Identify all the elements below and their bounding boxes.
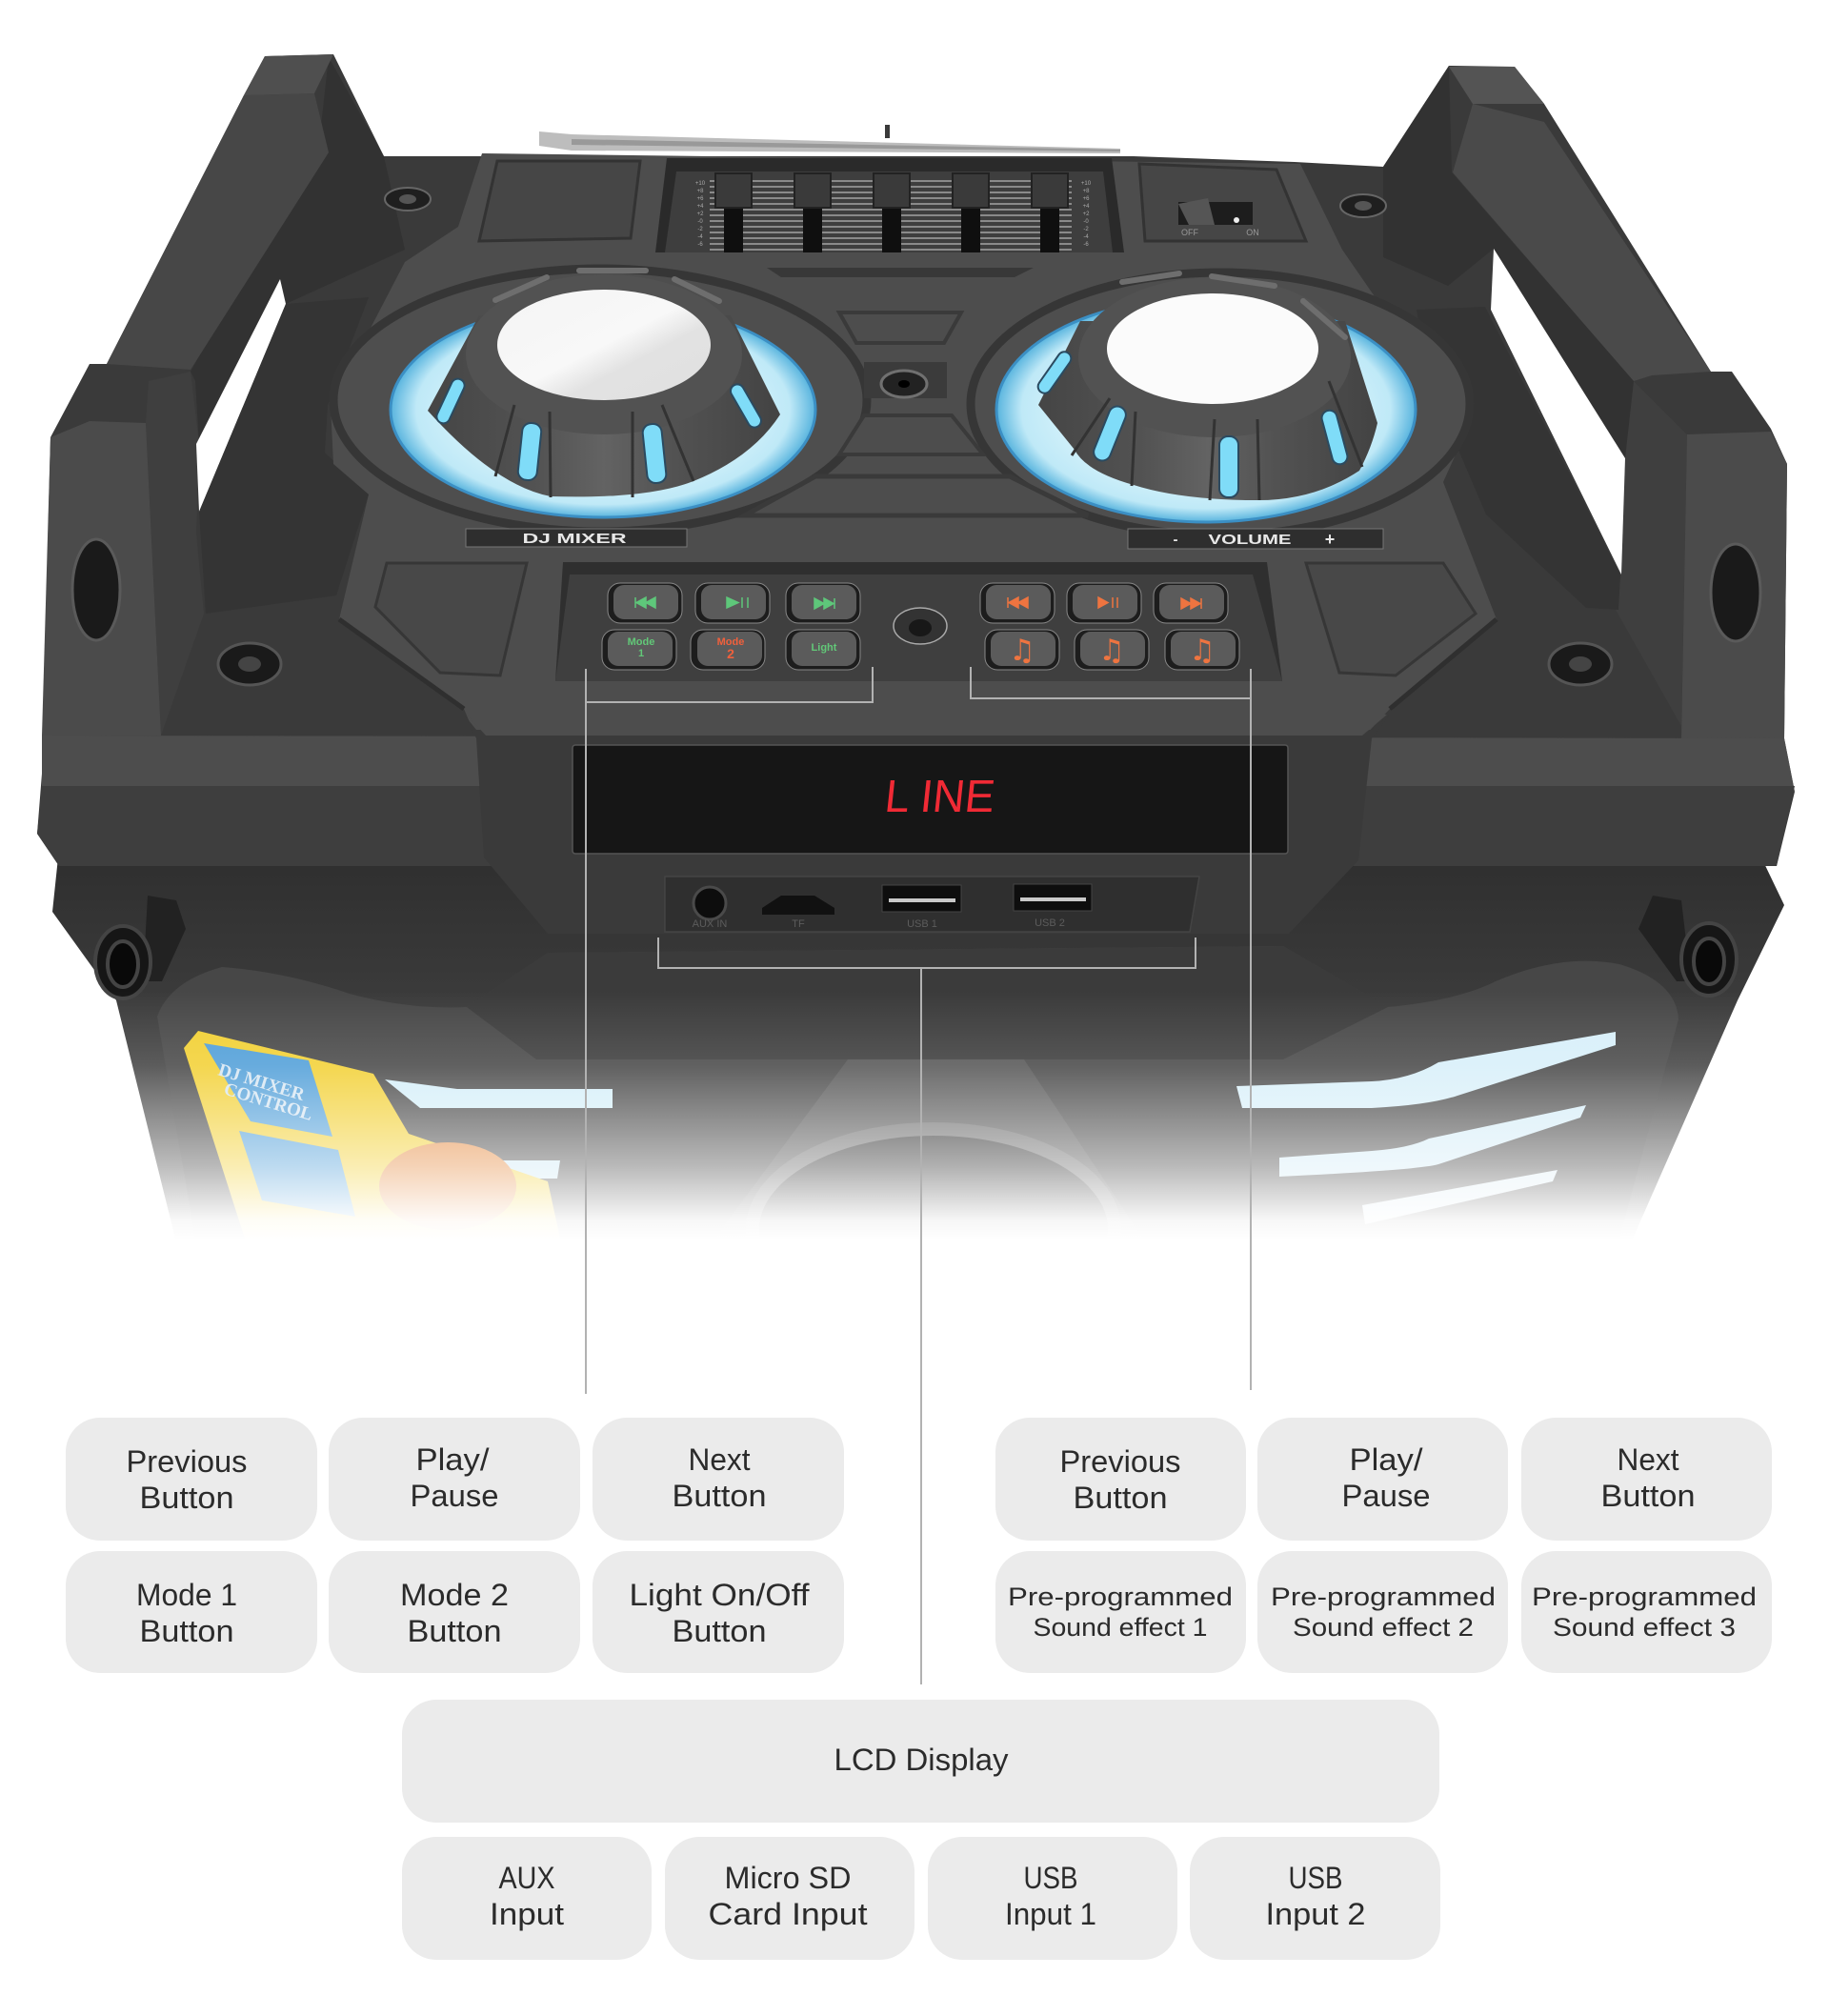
label: sound effect 3: Sound effect 3 [1553, 1613, 1736, 1642]
rim tabs [495, 271, 719, 301]
label: sound effect 2: Sound effect 2 [1293, 1613, 1474, 1642]
volume plate: + [1325, 530, 1335, 549]
left screw top [385, 188, 431, 211]
light strip left 2 [502, 1160, 560, 1179]
labels: right group [995, 1418, 1772, 1673]
centre slot upper [839, 312, 961, 343]
right screw top [1340, 194, 1386, 217]
speaker port [753, 1129, 1115, 1329]
right jog wheel [996, 273, 1416, 522]
power switch [1178, 198, 1259, 237]
silhouette [37, 54, 1795, 866]
label: previous button [995, 1418, 1246, 1541]
light strip right 2 [1279, 1105, 1586, 1177]
white gap right [1491, 249, 1625, 575]
knob rim [1078, 277, 1351, 437]
right handle bar [1453, 104, 1711, 381]
mode 2 key: Mode [717, 636, 744, 648]
left strut inner face [191, 57, 405, 444]
label: mode 1 button: Mode 1 [136, 1578, 237, 1612]
speaker cabinet [0, 857, 1829, 1353]
cabinet centre recess [467, 946, 1388, 1059]
silver disc [497, 290, 711, 400]
label: micro SD: Micro SD [724, 1861, 852, 1895]
left corner bolt [95, 896, 186, 998]
label: play pause [329, 1418, 580, 1541]
knob rim [466, 274, 742, 434]
play pause key [1067, 583, 1141, 623]
next key [786, 583, 860, 623]
blue ring [996, 297, 1416, 522]
mode 2 key [691, 630, 765, 670]
label: next button: Next [1618, 1442, 1679, 1477]
eq scale right: -4 [1083, 234, 1089, 240]
label: play pause: Play/ [415, 1442, 490, 1477]
play pause key [695, 583, 770, 623]
callout line: right button group [971, 667, 1251, 1390]
eq scale left: +8 [697, 189, 704, 194]
label: next button [1521, 1418, 1772, 1541]
blue ring [391, 302, 815, 517]
label: AUX input [402, 1837, 652, 1960]
usb 2: USB 2 [1035, 917, 1065, 929]
panel face [555, 575, 1282, 681]
label: mode 2 button: Button [408, 1614, 501, 1648]
eq scale right: -0 [1083, 219, 1089, 225]
label: USB input 2 [1190, 1837, 1440, 1960]
centre hub [864, 362, 947, 398]
lower left recess [375, 563, 527, 675]
label: AUX input: AUX [499, 1861, 554, 1895]
eq scale right: -2 [1083, 227, 1089, 232]
right handle cap [1449, 67, 1544, 104]
left handle bar [107, 93, 329, 370]
label: AUX input: Input [490, 1897, 564, 1931]
sound 3 key [1165, 630, 1239, 670]
label: light button: Light On/Off [629, 1578, 810, 1612]
label: play pause: Play/ [1349, 1442, 1423, 1477]
labels: inputs [402, 1837, 1440, 1960]
cabinet inner front panel [157, 946, 1678, 1239]
white gap left [196, 279, 286, 512]
label: sound effect 3: Pre-programmed [1532, 1583, 1757, 1611]
label: sound effect 3 [1521, 1551, 1772, 1673]
LCD display [573, 745, 1288, 854]
volume plate: VOLUME [1208, 532, 1292, 548]
label: previous button [66, 1418, 317, 1541]
fade to white [0, 991, 1829, 1240]
label: micro SD [665, 1837, 914, 1960]
left bezel [333, 269, 867, 532]
power switch: OFF [1181, 228, 1198, 237]
light key: Light [812, 642, 837, 654]
label: previous button: Previous [1059, 1444, 1181, 1479]
left handle cap [244, 54, 333, 95]
usb 1 [882, 885, 961, 930]
DJ mixer plate: DJ MIXER [522, 531, 627, 547]
previous key [980, 583, 1055, 623]
glow slots [434, 376, 764, 484]
label: mode 2 button: Mode 2 [400, 1578, 509, 1612]
speaker port funnel [714, 1059, 1143, 1239]
eq scale left: -2 [697, 227, 703, 232]
label: previous button: Previous [126, 1444, 248, 1479]
label: mode 1 button: Button [139, 1614, 234, 1648]
right screw bottom [1549, 643, 1612, 685]
mode 1 key: 1 [638, 648, 644, 659]
label: USB input 2: Input 2 [1265, 1897, 1366, 1931]
next key [1154, 583, 1228, 623]
right corner bolt [1638, 896, 1737, 996]
sticker blue panel 1 [204, 1043, 332, 1137]
sticker blue panel 2 [239, 1131, 355, 1217]
rim tabs [1122, 273, 1345, 337]
callout line: inputs and display [658, 937, 1196, 1684]
label: USB input 2: USB [1288, 1861, 1343, 1895]
label: play pause: Pause [410, 1479, 499, 1513]
label: next button: Button [673, 1479, 766, 1513]
previous key [608, 583, 682, 623]
label: sound effect 2 [1257, 1551, 1508, 1673]
button panel [555, 562, 1282, 681]
right textured deck [1417, 307, 1620, 610]
label: mode 2 button [329, 1551, 580, 1673]
right button group [980, 583, 1239, 670]
silver disc [1107, 293, 1318, 404]
faceplate [218, 125, 1612, 738]
light strip right 3 [1362, 1170, 1558, 1224]
eq scale right: -6 [1083, 242, 1089, 248]
white floor below fade [0, 1239, 1829, 1353]
eq scale right: +10 [1081, 181, 1092, 187]
glow slots [1035, 350, 1349, 497]
eq scale right: +6 [1083, 196, 1090, 202]
centre wide slot [745, 476, 1088, 515]
right top recess [1139, 164, 1306, 241]
equaliser [655, 158, 1124, 252]
left post [42, 421, 161, 736]
slider caps [715, 173, 1068, 208]
eq scale left: -4 [697, 234, 703, 240]
speaker body with handles [37, 54, 1795, 866]
eq scale left: +10 [695, 181, 706, 187]
label: sound effect 1: Sound effect 1 [1033, 1613, 1208, 1642]
lower right recess [1306, 563, 1476, 675]
light strip left 1 [385, 1079, 613, 1108]
base front face [37, 786, 1795, 866]
sticker blue panel 1: DJ MIXER [216, 1060, 307, 1105]
label: play pause [1257, 1418, 1508, 1541]
slider slots [734, 207, 1050, 252]
sound 3 key: ♫ [1189, 634, 1216, 668]
label: sound effect 1: Pre-programmed [1008, 1583, 1233, 1611]
left screw bottom [218, 643, 281, 685]
knob skirt [428, 315, 780, 496]
mode 2 key: 2 [727, 646, 734, 661]
centre slot top [767, 268, 1034, 277]
eq scale right: +8 [1083, 189, 1090, 194]
left top recess [479, 161, 640, 241]
label: previous button: Button [1073, 1481, 1168, 1515]
label: play pause: Pause [1341, 1479, 1431, 1513]
sticker [184, 1031, 560, 1239]
skirt ribs [1072, 381, 1362, 500]
aux jack: AUX IN [693, 918, 727, 930]
left lower handle [146, 372, 204, 736]
sd slot [762, 896, 834, 930]
left handle hole [72, 539, 120, 640]
knob skirt [1038, 321, 1377, 500]
label: sound effect 1 [995, 1551, 1246, 1673]
right strut inner face [1383, 66, 1687, 458]
sound 1 key [985, 630, 1059, 670]
label: previous button: Button [139, 1481, 234, 1515]
label: mode 1 button [66, 1551, 317, 1673]
eq scale left: +4 [697, 204, 704, 210]
eq scale right: +2 [1083, 212, 1090, 217]
label: LCD display: LCD Display [834, 1743, 1008, 1777]
DJ mixer plate [466, 529, 687, 547]
right bezel [971, 272, 1470, 535]
mode 1 key: Mode [628, 636, 654, 648]
label: sound effect 2: Pre-programmed [1271, 1583, 1496, 1611]
label: light button [593, 1551, 844, 1673]
sd slot: TF [792, 918, 805, 930]
light key [786, 630, 860, 670]
sound 2 key: ♫ [1098, 634, 1125, 668]
label: next button: Next [688, 1442, 751, 1477]
antenna [539, 125, 1120, 153]
sticker character [379, 1142, 516, 1230]
labels: left group [66, 1418, 844, 1673]
left textured deck [199, 297, 369, 614]
eq scale right: +4 [1083, 204, 1090, 210]
plate bevel edges [339, 619, 1497, 709]
centre slot lower [839, 415, 983, 454]
label: next button [593, 1418, 844, 1541]
left jog wheel [391, 271, 815, 517]
eq scale left: +2 [697, 212, 704, 217]
usb 1: USB 1 [907, 918, 937, 930]
volume plate [1128, 529, 1383, 549]
right handle hole [1711, 544, 1760, 641]
eq scale left: -0 [697, 219, 703, 225]
sound 1 key: ♫ [1009, 634, 1035, 668]
callout line: left button group [586, 667, 873, 1394]
label: light button: Button [673, 1614, 766, 1648]
eq scale left: -6 [697, 242, 703, 248]
label: USB input 1 [928, 1837, 1177, 1960]
label: USB input 1: Input 1 [1005, 1897, 1096, 1931]
right lower handle [1616, 381, 1687, 726]
central front bulge [464, 715, 1390, 934]
sound 2 key [1075, 630, 1149, 670]
label: USB input 1: USB [1023, 1861, 1078, 1895]
power switch: ON [1246, 228, 1259, 237]
label: LCD display [402, 1700, 1439, 1823]
usb 2 [1014, 884, 1092, 929]
panel lip [555, 562, 1282, 681]
left button group [602, 583, 860, 670]
bulge top surface [467, 715, 1387, 736]
label: next button: Button [1600, 1479, 1696, 1513]
label: micro SD: Card Input [709, 1897, 868, 1931]
eq scale left: +6 [697, 196, 704, 202]
mode 1 key [602, 630, 676, 670]
volume plate: - [1174, 532, 1177, 548]
skirt ribs [495, 405, 693, 497]
IO panel [665, 877, 1199, 932]
base top surface [42, 736, 1795, 792]
centre knob [894, 608, 947, 644]
LCD readout: L INE [882, 771, 997, 822]
sticker blue panel 1: CONTROL [222, 1079, 315, 1125]
aux jack [693, 887, 727, 930]
light strip right 1 [1236, 1032, 1616, 1108]
right post [1681, 432, 1787, 738]
